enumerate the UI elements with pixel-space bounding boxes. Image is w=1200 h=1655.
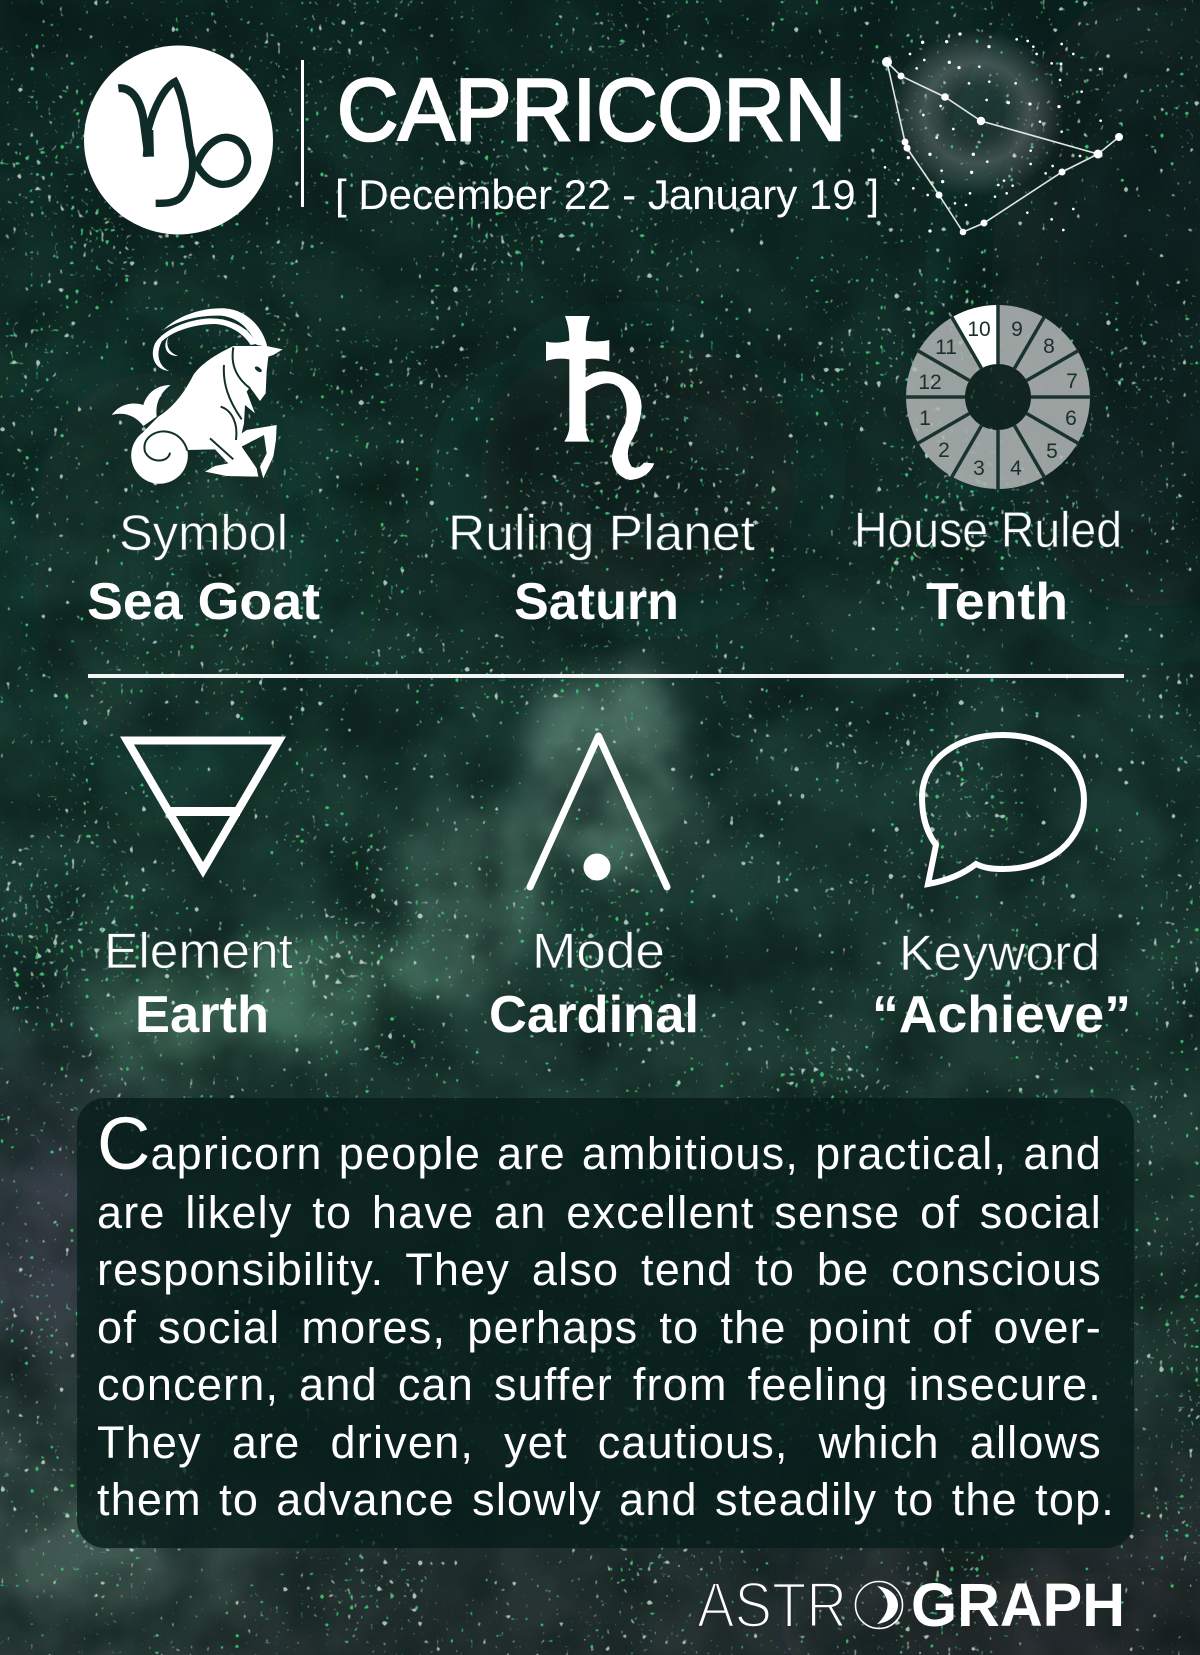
- icon: house wheel: 5: [1046, 440, 1058, 463]
- icon: house wheel: 9: [1011, 318, 1023, 341]
- value: Tenth: Tenth: [926, 573, 1068, 631]
- icon: house wheel: 11: [935, 336, 957, 359]
- title: CAPRICORN: [337, 60, 846, 159]
- icon: constellation: [882, 29, 1123, 235]
- label: Symbol: Symbol: [119, 505, 288, 561]
- icon: Saturn glyph: [546, 316, 654, 480]
- icon: house wheel: 10: [967, 318, 991, 341]
- value: Sea Goat: Sea Goat: [87, 573, 320, 631]
- wedge: tenth house highlighted: [952, 305, 998, 368]
- value: "Achieve": “Achieve”: [872, 986, 1131, 1044]
- icon: speech bubble: [922, 735, 1084, 884]
- brand logo: ASTR: [697, 1569, 847, 1641]
- label: Element: Element: [104, 923, 293, 979]
- panel: description: them to advance slowly and steadily to the top.: [97, 1474, 1115, 1525]
- label: House Ruled: House Ruled: [854, 502, 1122, 558]
- icon: house wheel: [905, 304, 1091, 490]
- icon: house wheel: 2: [938, 439, 950, 462]
- panel: description: They are driven, yet cautious, which allows: [97, 1417, 1102, 1468]
- icon: house wheel: 4: [1010, 457, 1022, 480]
- icon: house wheel: 3: [973, 457, 985, 480]
- label: Keyword: Keyword: [899, 925, 1100, 981]
- icon: house wheel: 8: [1043, 335, 1055, 358]
- label: Ruling Planet: Ruling Planet: [448, 505, 755, 561]
- header logo: Capricorn glyph in white circle: [84, 46, 273, 234]
- value: Earth: Earth: [135, 986, 269, 1044]
- brand logo: [697, 1569, 1125, 1641]
- icon: sea goat: [112, 308, 283, 484]
- icon: earth element triangle: [127, 740, 279, 870]
- brand logo: GRAPH: [911, 1571, 1125, 1639]
- label: Mode: Mode: [532, 923, 665, 979]
- icon: house wheel: 6: [1065, 407, 1077, 430]
- date range: [ December 22 - January 19 ]: [335, 171, 879, 218]
- panel: description: [77, 1098, 1134, 1548]
- icon: house wheel: 7: [1066, 370, 1078, 393]
- header divider: [301, 60, 304, 207]
- value: Cardinal: Cardinal: [489, 986, 699, 1044]
- panel: description: Capricorn people are ambitious, practical, and: [97, 1102, 1102, 1185]
- panel: description: of social mores, perhaps to the point of over-: [97, 1302, 1102, 1353]
- panel: description: responsibility. They also tend to be conscious: [97, 1244, 1102, 1295]
- icon: cardinal mode: [530, 736, 667, 887]
- icon: house wheel: 12: [918, 371, 942, 394]
- section divider: [88, 674, 1124, 678]
- value: Saturn: Saturn: [514, 573, 679, 631]
- panel: description: concern, and can suffer from feeling insecure.: [97, 1359, 1102, 1410]
- icon: house wheel: 1: [919, 407, 931, 430]
- panel: description: are likely to have an excellent sense of social: [97, 1187, 1102, 1238]
